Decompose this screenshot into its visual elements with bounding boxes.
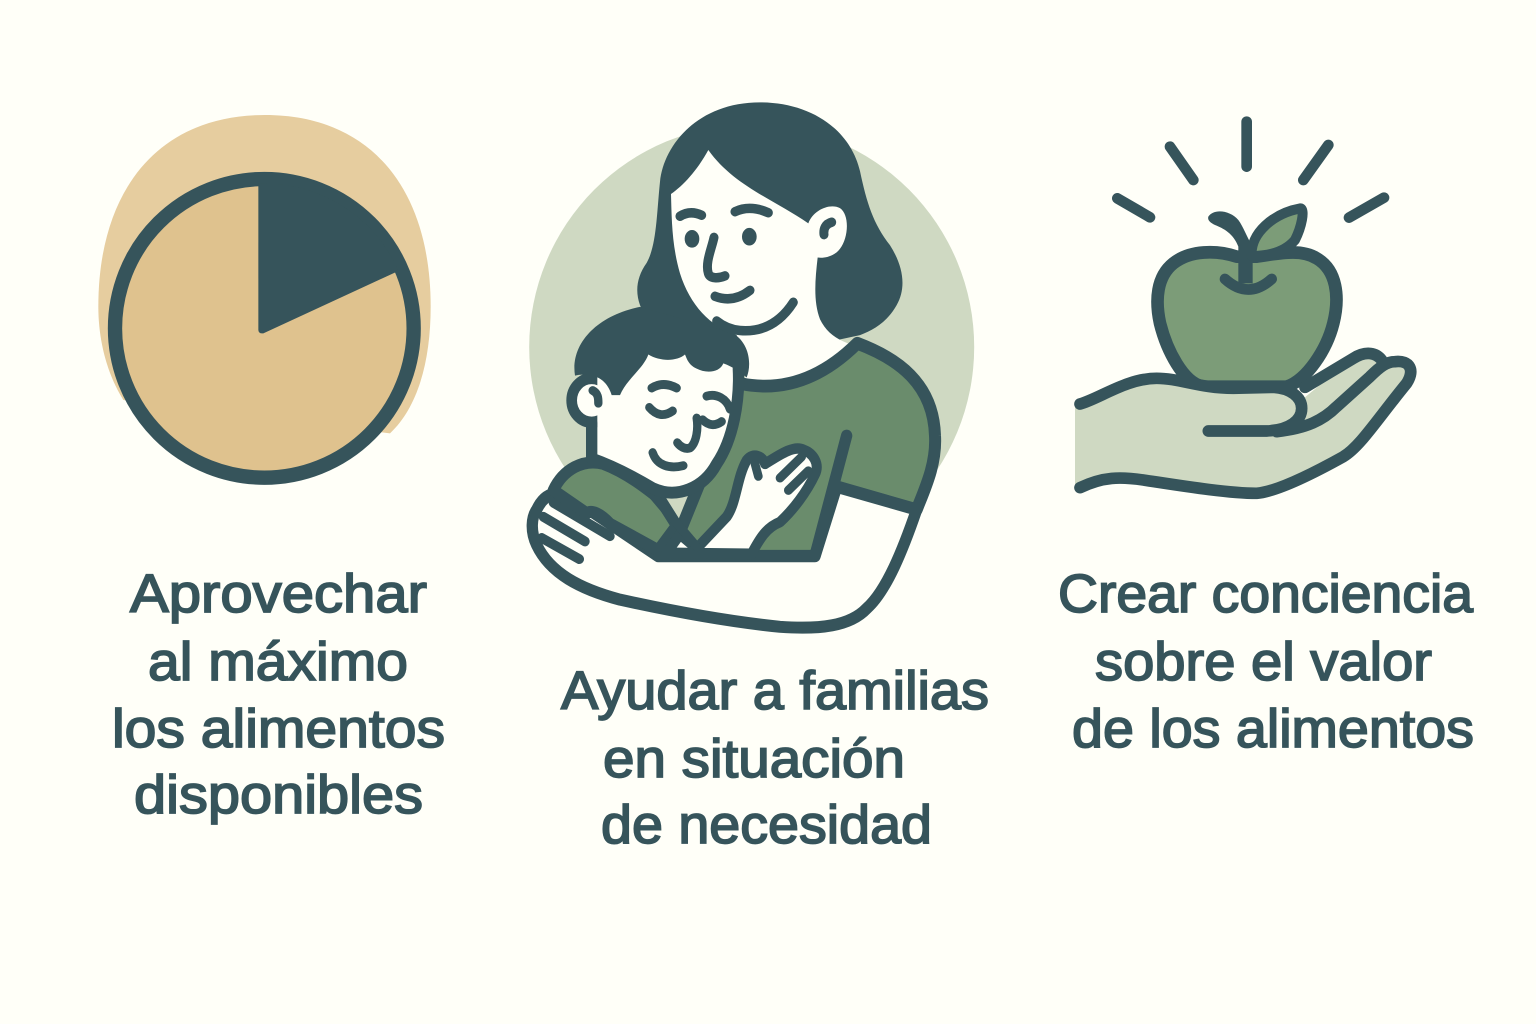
caption: aprovechar — [112, 564, 445, 825]
apple stem — [1208, 211, 1253, 283]
caption: crear conciencia: sobre el valor — [1095, 632, 1432, 692]
mother's hair — [637, 102, 902, 358]
mother's shirt — [670, 343, 935, 556]
child's face fill — [597, 337, 737, 493]
caption: aprovechar: Aprovechar — [130, 564, 427, 624]
caption: ayudar: de necesidad — [601, 795, 932, 855]
caption: ayudar: en situación — [603, 729, 905, 789]
rays — [1117, 122, 1384, 218]
mother's arm and hand — [532, 487, 917, 628]
caption: crear conciencia: Crear conciencia — [1058, 564, 1474, 624]
caption: crear conciencia: de los alimentos — [1072, 699, 1474, 759]
child's facial features — [593, 385, 730, 467]
caption: aprovechar: al máximo — [148, 632, 408, 692]
armpit line — [815, 436, 847, 556]
apple dimple — [1225, 279, 1272, 289]
icon: pie chart with one sixth dark — [98, 115, 431, 478]
fingers of mother's hand — [542, 503, 610, 559]
caption: aprovechar: los alimentos — [112, 699, 445, 759]
mother's eyes — [685, 228, 757, 248]
caption: ayudar — [561, 661, 989, 855]
mother's face and neck — [671, 150, 853, 393]
child's hand — [667, 448, 817, 554]
child's face outline — [592, 369, 739, 493]
child's hair — [574, 307, 749, 395]
child's hand details — [653, 457, 808, 547]
apple — [1158, 252, 1336, 387]
icon: mother hugging child — [532, 102, 935, 628]
gap between fingers — [1300, 387, 1309, 395]
icon: hand holding apple — [1075, 122, 1412, 493]
child's ear — [572, 379, 612, 422]
caption: aprovechar: disponibles — [134, 765, 423, 825]
apple leaf — [1252, 208, 1303, 256]
hand outline — [1080, 353, 1411, 493]
hand fill — [1075, 354, 1412, 493]
caption: ayudar: Ayudar a familias — [561, 661, 989, 721]
child's sleeve — [553, 463, 677, 550]
icon: background circle behind mother — [529, 124, 974, 570]
caption: crear conciencia — [1058, 564, 1474, 759]
mother's facial features — [680, 208, 832, 331]
